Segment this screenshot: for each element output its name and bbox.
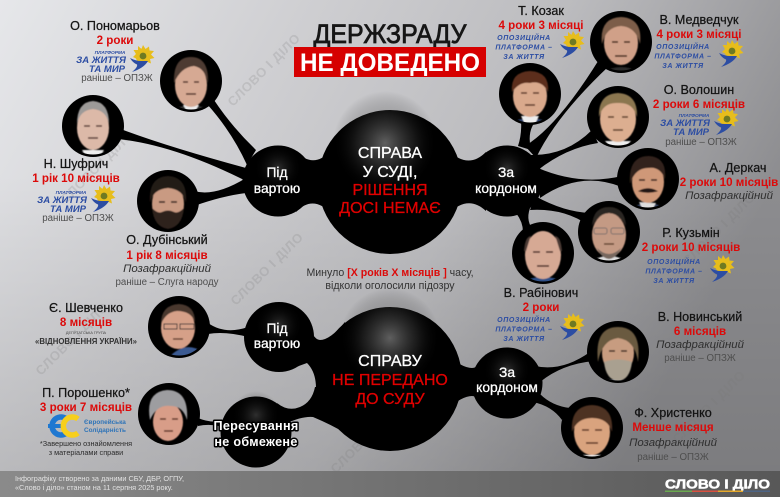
person: Дубінський: раніше – Слуга народу <box>116 277 219 288</box>
person: Медведчук: 4 роки 3 місяці <box>656 28 742 41</box>
mind map bottom: blobs and connectors <box>138 296 649 468</box>
hub bottom left: in custody <box>254 321 300 351</box>
title badge <box>294 47 486 77</box>
logo: За життя та мир: ЗА ЖИТТЯ <box>37 195 88 206</box>
watermarks: СЛОВО І ДІЛО <box>669 367 748 446</box>
logo: За життя та мир: ТА МИР <box>89 64 126 75</box>
person: Волошин: О. Волошин <box>664 83 734 97</box>
logo: Опозиційна платформа: ПЛАТФОРМА – <box>654 54 712 60</box>
logo: Опозиційна платформа: ЗА ЖИТТЯ <box>653 278 695 285</box>
person: Деркач: Позафракційний <box>685 190 774 202</box>
logo: Опозиційна платформа: ПЛАТФОРМА – <box>495 326 553 334</box>
logo: Опозиційна платформа: ЗА ЖИТТЯ <box>503 54 545 61</box>
logo: Опозиційна платформа <box>645 255 734 285</box>
portrait: Медведчук <box>602 17 640 74</box>
logo: За життя та мир: ПЛАТФОРМА <box>679 113 710 119</box>
hub bottom left: movement unrestricted <box>213 419 299 449</box>
person: Шуфрич: Н. Шуфрич <box>44 157 108 171</box>
logo: Опозиційна платформа <box>654 40 744 70</box>
portrait: Деркач <box>630 156 666 211</box>
person: Кузьмін: Р. Кузьмін <box>662 226 720 240</box>
person: Кузьмін <box>642 226 740 285</box>
person: Порошенко: *Завершено ознайомлення <box>40 439 132 448</box>
person: Рабінович: В. Рабінович <box>504 286 578 300</box>
person: Шевченко: 8 місяців <box>60 316 112 329</box>
hub top left: in custody <box>254 165 300 196</box>
person: Христенко: раніше – ОПЗЖ <box>637 452 709 463</box>
hub top: case in court <box>339 145 441 217</box>
highlights <box>232 91 531 439</box>
person: Пономарьов: 2 роки <box>97 34 133 47</box>
hub top left: in custody: вартою <box>254 181 300 196</box>
person: Волошин <box>653 83 745 148</box>
logo: Опозиційна платформа: ЗА ЖИТТЯ <box>503 336 545 343</box>
portrait: Порошенко <box>149 390 187 441</box>
hub bottom left: in custody: Під <box>266 321 288 336</box>
caption: відколи оголосили підозру <box>325 280 455 292</box>
person: Шевченко <box>35 301 137 346</box>
person: Деркач: А. Деркач <box>709 161 767 175</box>
person: Рабінович: 2 роки <box>523 301 559 314</box>
hub top: case in court: У СУДІ, <box>363 164 417 181</box>
logo: Опозиційна платформа: ОПОЗИЦІЙНА <box>656 42 710 51</box>
person: Пономарьов: О. Пономарьов <box>70 19 160 33</box>
watermarks: СЛОВО І ДІЛО <box>227 229 306 308</box>
person: Козак <box>495 4 584 61</box>
hub top right: abroad <box>475 165 537 196</box>
hub bottom: not sent to court: НЕ ПЕРЕДАНО <box>332 372 448 389</box>
person: Порошенко: П. Порошенко* <box>42 386 130 400</box>
caption <box>306 267 474 292</box>
hub top left: in custody: Під <box>266 165 288 180</box>
person: Козак: Т. Козак <box>518 4 564 18</box>
hub bottom right: abroad: кордоном <box>476 380 538 395</box>
person: Новинський: Позафракційний <box>656 339 745 351</box>
title <box>294 19 486 77</box>
person: Пономарьов: раніше – ОПЗЖ <box>81 73 153 84</box>
person: Новинський: В. Новинський <box>658 310 742 324</box>
person: Порошенко <box>40 386 132 457</box>
person: Порошенко: з матеріалами справи <box>49 448 123 457</box>
person: Христенко: Менше місяця <box>632 421 714 434</box>
logo: Опозиційна платформа: ПЛАТФОРМА – <box>495 44 553 52</box>
portrait: Козак <box>511 70 549 122</box>
person: Деркач: 2 роки 10 місяців <box>680 176 778 189</box>
person: Христенко: Позафракційний <box>629 437 718 449</box>
source note: «Слово і діло» станом на 11 серпня 2025 року. <box>15 483 173 492</box>
portrait: Рабінович <box>523 231 563 285</box>
logo: Європейська Солідарність: Солідарність <box>84 426 126 434</box>
person: Шевченко: ДЕПУТАТСЬКА ГРУПА <box>66 331 107 335</box>
logo: Опозиційна платформа <box>495 31 584 61</box>
portrait: Шуфрич <box>76 100 110 154</box>
person: Дубінський: Позафракційний <box>123 263 212 275</box>
watermarks: СЛОВО І ДІЛО <box>32 299 111 378</box>
hub bottom: not sent to court: ДО СУДУ <box>355 391 426 408</box>
source note: Інфографіку створено за даними СБУ, ДБР, ОГПУ, <box>15 474 184 483</box>
hub top: case in court: ДОСІ НЕМАЄ <box>339 200 441 217</box>
hub bottom right: abroad: За <box>499 365 515 380</box>
logo: Опозиційна платформа: ЗА ЖИТТЯ <box>662 63 704 70</box>
person: Дубінський: О. Дубінський <box>126 233 208 247</box>
hub bottom right: abroad <box>476 365 538 395</box>
person: Дубінський <box>116 233 219 288</box>
watermarks: СЛОВО І ДІЛО <box>57 127 136 206</box>
logo: Європейська Солідарність: Європейська <box>84 418 126 426</box>
logo: Європейська Солідарність <box>48 417 126 435</box>
person: Новинський: раніше – ОПЗЖ <box>664 353 736 364</box>
portrait: Волошин <box>599 93 637 148</box>
person: Волошин: 2 роки 6 місяців <box>653 98 745 111</box>
hub bottom left: movement unrestricted: Пересування <box>213 419 299 433</box>
logo: За життя та мир <box>76 45 154 75</box>
person: Шуфрич: 1 рік 10 місяців <box>32 172 120 185</box>
portrait: Шевченко <box>160 304 198 356</box>
hub top: case in court: СПРАВА <box>358 145 422 162</box>
person: Рабінович <box>495 286 584 343</box>
portrait: Новинський <box>597 327 639 384</box>
hub top right: abroad: кордоном <box>475 181 537 196</box>
logo: За життя та мир <box>37 185 116 215</box>
title: НЕ ДОВЕДЕНО <box>300 49 480 77</box>
person: Новинський: 6 місяців <box>674 325 726 338</box>
person: Шуфрич <box>32 157 120 224</box>
footer band <box>0 471 780 497</box>
person: Христенко: Ф. Христенко <box>634 406 712 420</box>
person: Дубінський: 1 рік 8 місяців <box>126 249 208 262</box>
watermarks: СЛОВО І ДІЛО <box>679 189 758 268</box>
hub bottom left: in custody: вартою <box>254 336 300 351</box>
watermarks: СЛОВО І ДІЛО <box>327 397 406 476</box>
person: Новинський <box>656 310 745 364</box>
hub bottom: not sent to court <box>332 353 448 408</box>
portrait: Пономарьов <box>174 57 208 113</box>
portrait: Дубінський <box>150 176 186 229</box>
logo: Опозиційна платформа: ПЛАТФОРМА – <box>645 268 703 276</box>
person: Кузьмін: 2 роки 10 місяців <box>642 241 740 254</box>
person: Шевченко: Є. Шевченко <box>49 301 123 315</box>
source note <box>15 474 184 492</box>
person: Шуфрич: раніше – ОПЗЖ <box>42 213 114 224</box>
caption: Минуло [X років X місяців ] часу, <box>306 267 474 279</box>
logo: Слово і Діло: СЛОВО І ДІЛО <box>665 476 770 492</box>
person: Козак: 4 роки 3 місяці <box>498 19 584 32</box>
person: Порошенко: 3 роки 7 місяців <box>40 401 132 414</box>
logo: За життя та мир: ПЛАТФОРМА <box>56 190 87 196</box>
logo: Опозиційна платформа: ОПОЗИЦІЙНА <box>497 33 551 42</box>
mind map top: blobs and connectors <box>62 11 679 284</box>
logo: За життя та мир: ЗА ЖИТТЯ <box>660 118 711 129</box>
title: ДЕРЖЗРАДУ <box>314 19 467 49</box>
person: Пономарьов <box>70 19 160 84</box>
logo: Опозиційна платформа: ОПОЗИЦІЙНА <box>497 315 551 324</box>
person: Шевченко: «ВІДНОВЛЕННЯ УКРАЇНИ» <box>35 337 137 346</box>
logo: За життя та мир: ПЛАТФОРМА <box>95 50 126 56</box>
hub bottom: not sent to court: СПРАВУ <box>358 353 423 370</box>
logo: За життя та мир: ЗА ЖИТТЯ <box>76 55 127 66</box>
portrait: Кузьмін <box>592 207 626 264</box>
hub top right: abroad: За <box>498 165 514 180</box>
watermarks: СЛОВО І ДІЛО <box>224 30 303 109</box>
person: Деркач <box>680 161 778 202</box>
logo: Опозиційна платформа: ОПОЗИЦІЙНА <box>647 257 701 266</box>
hub bottom left: movement unrestricted: не обмежене <box>214 435 298 449</box>
person: Волошин: раніше – ОПЗЖ <box>665 137 737 148</box>
person: Христенко <box>629 406 718 463</box>
person: Медведчук <box>654 13 744 70</box>
logo: За життя та мир: ТА МИР <box>50 204 87 215</box>
hub top: case in court: РІШЕННЯ <box>352 182 428 199</box>
portrait: Христенко <box>572 405 612 460</box>
logo: За життя та мир <box>660 108 738 138</box>
logo: За життя та мир: ТА МИР <box>673 127 710 138</box>
person: Медведчук: В. Медведчук <box>659 13 739 27</box>
logo: Опозиційна платформа <box>495 313 584 343</box>
